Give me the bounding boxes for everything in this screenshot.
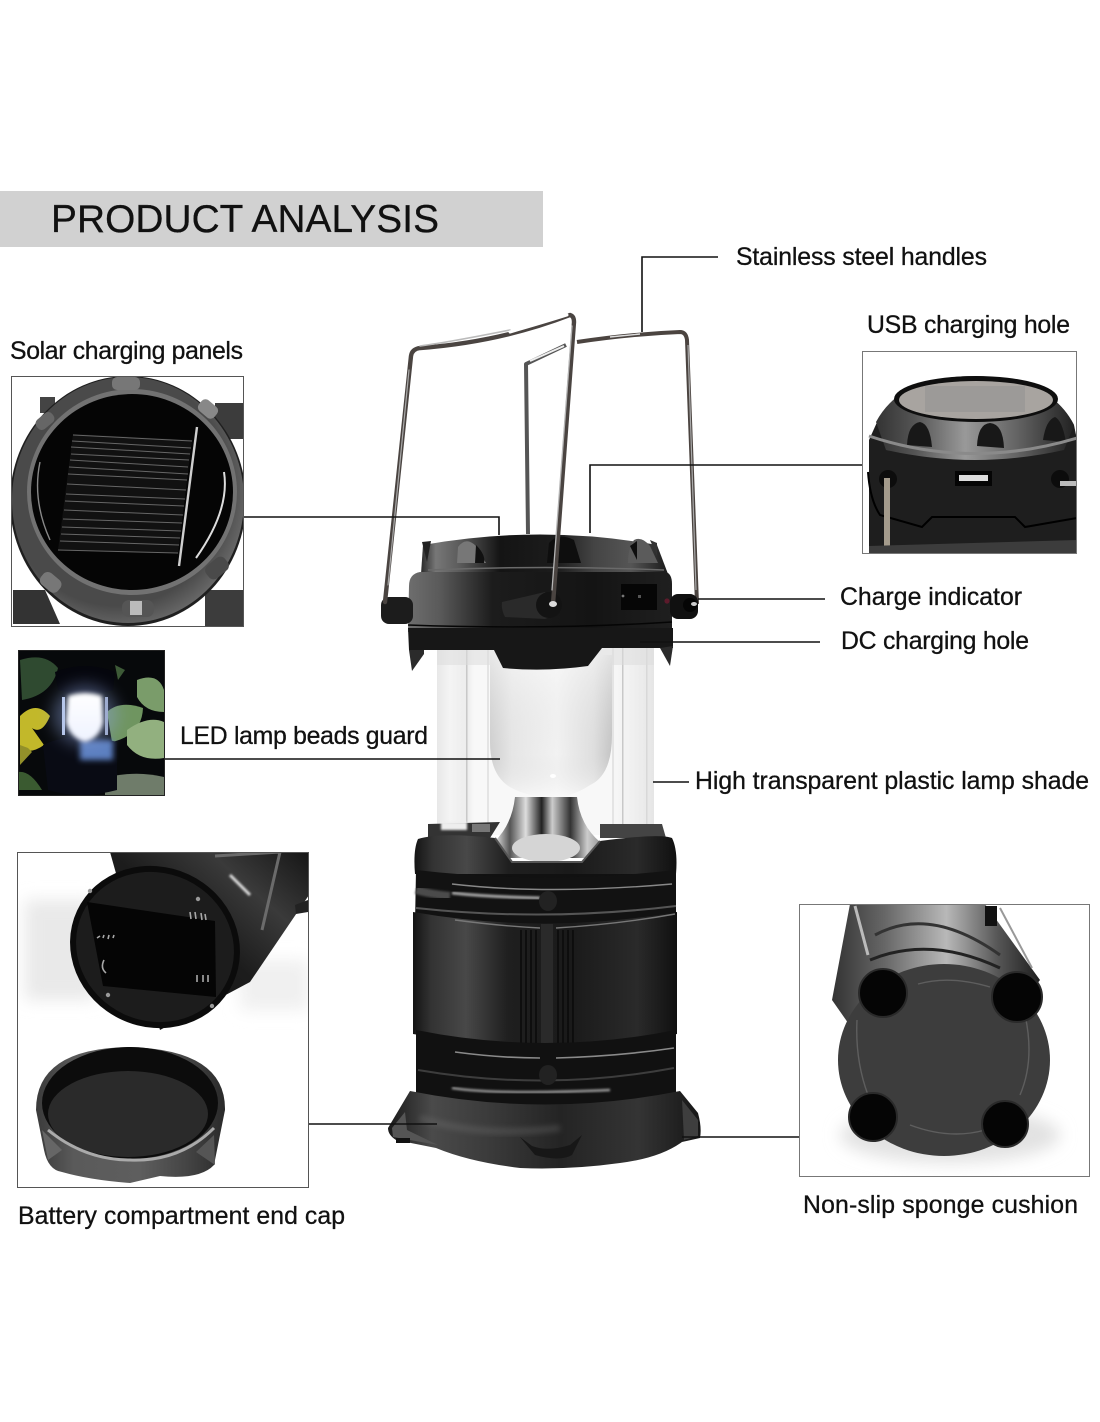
leader line: DC charging hole	[640, 641, 820, 643]
USB port	[955, 471, 992, 486]
title banner	[0, 191, 543, 247]
label: battery compartment end cap: Battery compartment end cap	[18, 1203, 345, 1230]
panel: solar charging panels	[10, 376, 246, 628]
label: stainless steel handles: Stainless steel handles	[736, 244, 987, 271]
main body	[413, 912, 677, 1049]
label: USB charging hole: USB charging hole	[867, 312, 1070, 339]
leader line: LED lamp beads guard	[165, 758, 500, 760]
lantern product photo	[381, 315, 701, 1168]
battery lantern cylinder	[70, 853, 308, 1030]
left knob	[381, 597, 413, 624]
upper ribs	[415, 870, 676, 924]
top cap	[381, 534, 698, 671]
lower ribs	[416, 1030, 676, 1109]
ring studs	[33, 377, 231, 617]
right knob	[670, 594, 698, 619]
underside lantern body	[832, 905, 1040, 1022]
leader line: USB charging hole	[590, 465, 862, 533]
vent notches	[457, 537, 658, 563]
back handle	[526, 332, 697, 604]
chrome lamp stem	[494, 797, 600, 862]
base with feet	[388, 1091, 701, 1168]
leader line: charge indicator	[698, 598, 825, 600]
title banner: PRODUCT ANALYSIS	[51, 198, 439, 241]
DC charging socket	[621, 584, 657, 610]
leader line: non-slip cushion	[682, 1136, 799, 1138]
panel: non-slip sponge cushion	[799, 904, 1090, 1177]
panel: USB charging hole	[862, 351, 1077, 554]
lantern silhouette	[55, 671, 58, 676]
end cap	[36, 1047, 225, 1183]
leader line: battery compartment	[309, 1123, 437, 1125]
leader line: solar charging panels	[244, 517, 499, 535]
cushion pads	[849, 969, 1042, 1147]
label: solar charging panels: Solar charging panels	[10, 338, 243, 365]
front handle	[385, 315, 574, 607]
panel: lit lantern photo	[18, 650, 165, 796]
lower body collar	[414, 835, 676, 1102]
vent notches	[907, 417, 1066, 448]
label: LED lamp beads guard: LED lamp beads guard	[180, 723, 428, 750]
solar cell	[58, 427, 197, 566]
charge indicator	[664, 598, 670, 604]
leader line: stainless steel handles	[642, 257, 718, 332]
label: lamp shade: High transparent plastic lamp shade	[695, 768, 1089, 795]
leaves	[18, 657, 164, 796]
leader line: lamp shade	[653, 781, 689, 783]
label: DC charging hole: DC charging hole	[841, 628, 1029, 655]
centre knob	[502, 592, 562, 619]
panel: battery compartment end cap	[17, 838, 309, 1188]
label: charge indicator: Charge indicator	[840, 584, 1022, 611]
LED lamp beads guard	[490, 655, 612, 797]
lamp shade	[428, 645, 666, 838]
label: non-slip sponge cushion: Non-slip sponge cushion	[803, 1192, 1078, 1219]
lit shade	[66, 693, 103, 742]
